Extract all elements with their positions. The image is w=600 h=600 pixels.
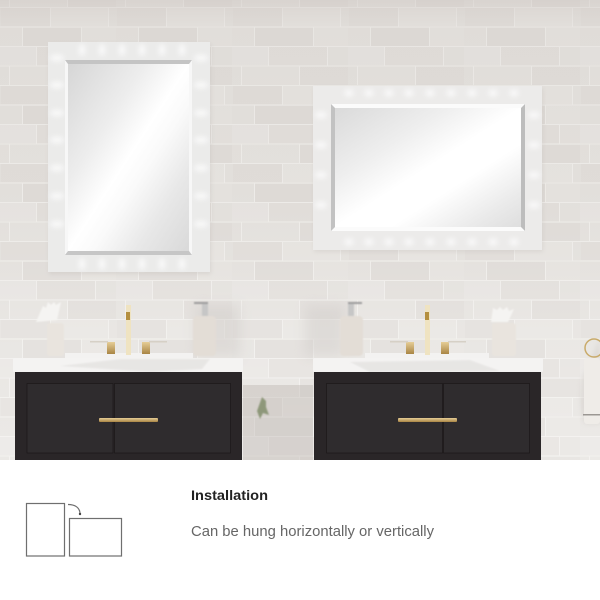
photo: bathroom wall of white tile [0,0,600,460]
icon: rotation arrow [68,504,81,515]
left vanity [13,302,243,460]
glass with bevel [65,60,192,255]
towel ring and towel [580,338,600,424]
soap dispenser [340,302,363,356]
text: installation description: Can be hung horizontally or vertically [191,523,434,540]
glass with bevel [331,104,525,231]
marble counter [313,358,543,372]
drawer fronts [27,384,230,453]
basin and faucet [365,305,489,360]
icon: landscape rectangle [70,518,122,556]
frame scallops [315,89,540,246]
brass handle [398,418,457,422]
drawer fronts [326,384,530,453]
mirror: portrait orientation [48,42,211,274]
toothbrush cup [491,307,516,356]
heading: Installation: Installation [191,487,268,503]
cabinet [15,372,242,460]
frame scallops [50,44,208,270]
cabinet [314,372,541,460]
brass handle [99,418,158,422]
icon: portrait rectangle [26,504,64,556]
marble counter [13,358,243,372]
soap dispenser [193,302,216,356]
white caption band [0,460,600,600]
mirror: landscape orientation [313,86,543,252]
right vanity [313,302,543,460]
toothbrush cup [36,302,64,356]
plant sprig [257,397,269,419]
basin and faucet [65,305,193,360]
icon: portrait to landscape rotation [26,504,122,556]
